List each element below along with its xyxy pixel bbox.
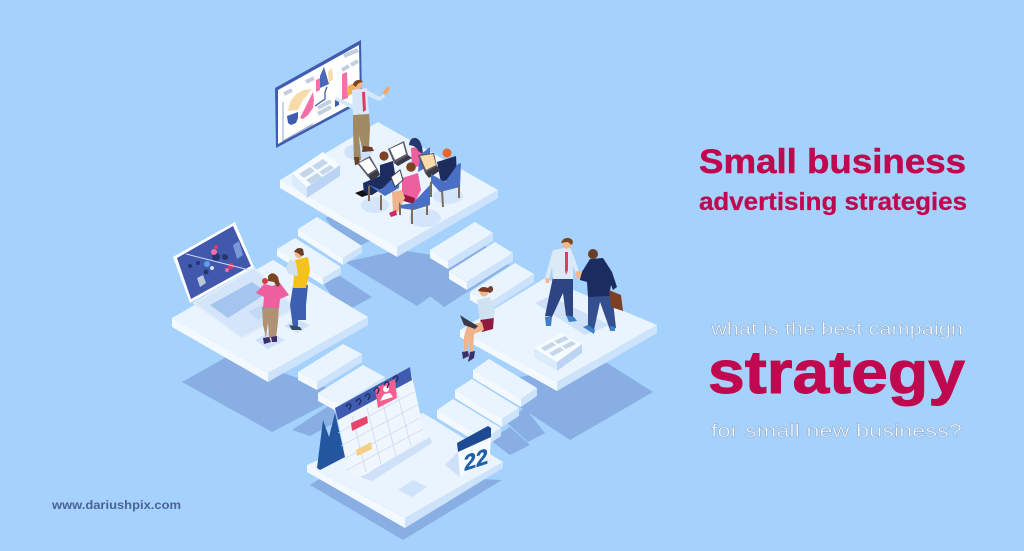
person: man in yellow	[284, 248, 310, 333]
icon: paper stack	[534, 333, 582, 371]
person: front woman	[389, 162, 430, 224]
audience seated with laptops	[355, 138, 463, 227]
icon: briefcase	[609, 290, 623, 311]
icon: large laptop	[173, 222, 296, 338]
person: front left man	[355, 151, 400, 210]
person: right man	[418, 148, 461, 207]
heading: advertising strategies: advertising strategies	[699, 188, 967, 216]
person: woman in pink	[255, 273, 289, 349]
person: presenter	[335, 80, 390, 165]
person: seated woman with laptop	[460, 286, 495, 362]
floor shadows	[182, 212, 653, 540]
icon: date cube 22: 22	[464, 444, 488, 476]
icon: pine trees	[317, 413, 345, 470]
steps between platforms	[277, 217, 537, 447]
person: man in white shirt	[545, 238, 579, 326]
icon: paper stack	[292, 152, 340, 198]
panel: meeting platform	[460, 238, 657, 391]
icon: presentation board	[275, 40, 362, 148]
person: back woman	[388, 138, 430, 172]
website url: www.dariushpix.com	[51, 498, 181, 512]
panel: calendar platform	[307, 367, 503, 528]
text: for small new business?: for small new business?	[711, 421, 962, 441]
panel: top presentation platform	[275, 40, 498, 257]
icon: date cube 22	[445, 426, 491, 477]
text: what is the best campaign: what is the best campaign	[710, 319, 963, 339]
heading: strategy: strategy	[708, 339, 966, 406]
person: man in navy suit	[576, 249, 623, 334]
panel: laptop platform	[172, 222, 368, 382]
icon: wall calendar	[335, 367, 425, 477]
heading: Small business: Small business	[699, 143, 966, 181]
